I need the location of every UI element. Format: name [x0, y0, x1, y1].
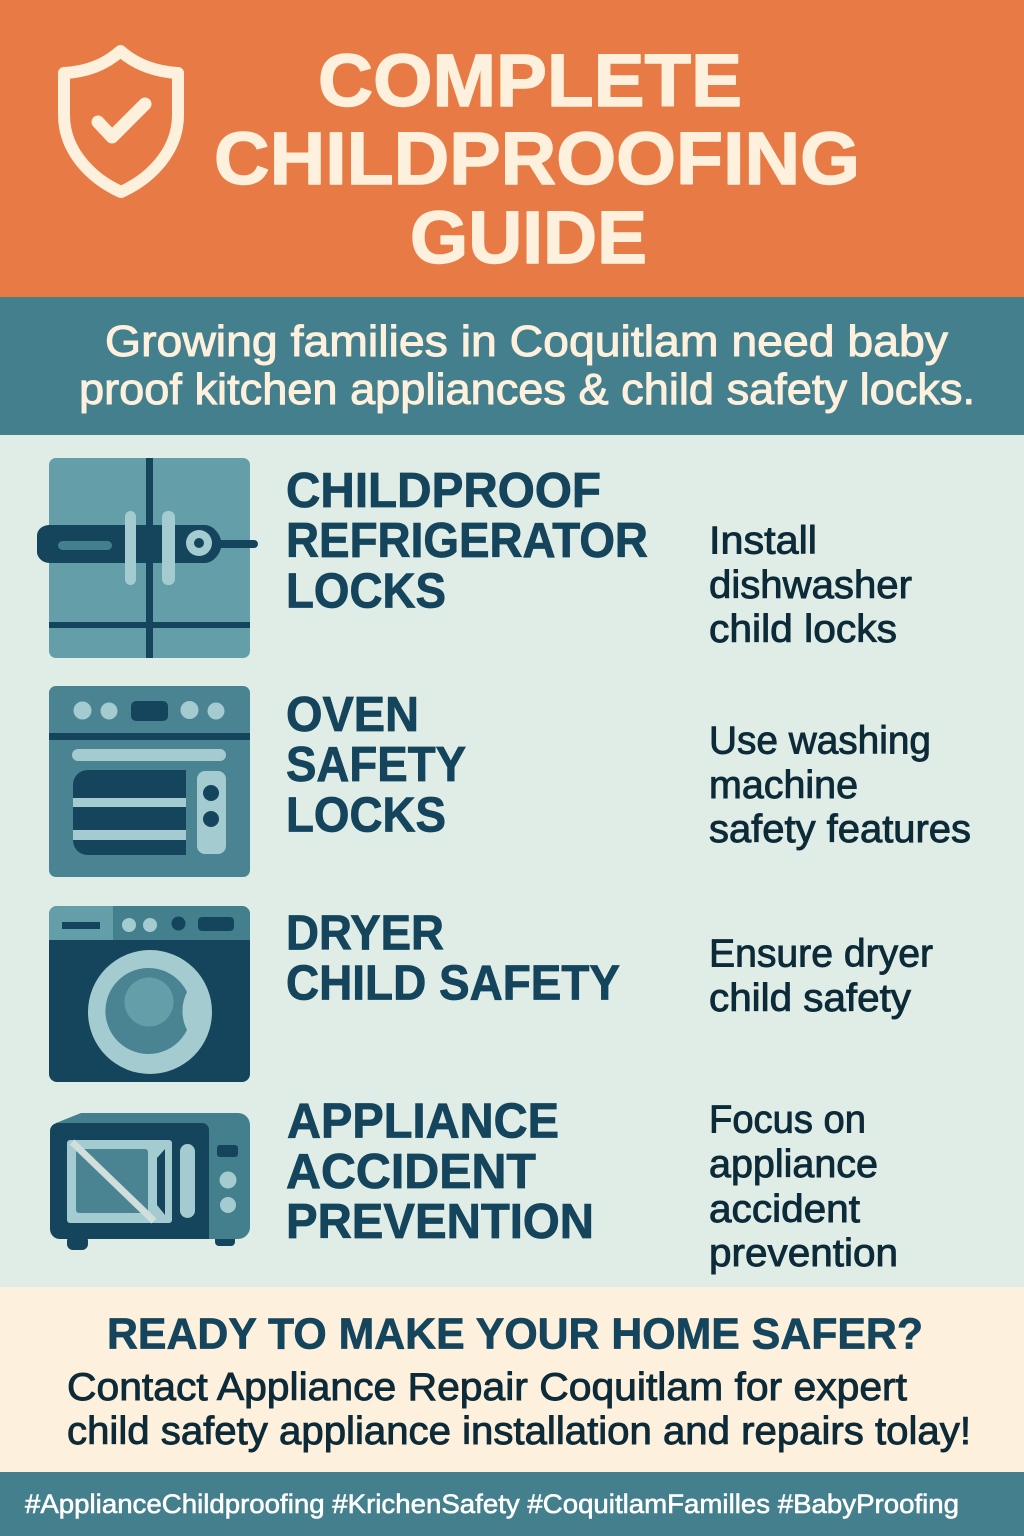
heading: REFRIGERATOR: [286, 514, 648, 568]
row: oven safety locks: [49, 686, 971, 877]
tip: child safety: [709, 977, 912, 1020]
tip: prevention: [709, 1232, 898, 1275]
header banner: [0, 0, 1024, 297]
heading: APPLIANCE: [287, 1094, 559, 1148]
icon: shield with check: [64, 51, 178, 192]
heading: ACCIDENT: [286, 1145, 536, 1199]
tip: Ensure dryer: [709, 932, 933, 976]
title: [214, 39, 860, 279]
tip: Install: [709, 520, 817, 562]
heading: PREVENTION: [286, 1195, 594, 1249]
tip: [709, 1098, 898, 1275]
tip: child locks: [709, 608, 897, 651]
call to action text: Contact Appliance Repair Coquitlam for expert: [67, 1366, 907, 1409]
row: refrigerator locks: [37, 458, 912, 658]
heading: [286, 464, 648, 618]
icon: dryer: [49, 906, 250, 1082]
heading: LOCKS: [286, 788, 446, 842]
icon: refrigerator with lock: [37, 458, 258, 658]
subtitle band: [0, 297, 1024, 435]
heading: [286, 906, 620, 1010]
row: dryer child safety: [49, 906, 933, 1082]
tip: appliance: [709, 1143, 878, 1186]
tip: [709, 720, 971, 851]
tip: dishwasher: [709, 564, 912, 607]
heading: LOCKS: [286, 564, 446, 618]
subtitle band: proof kitchen appliances & child safety locks.: [79, 365, 975, 414]
footer hashtags: #ApplianceChildproofing #KrichenSafety #CoquitlamFamilles #BabyProofing: [25, 1489, 959, 1519]
icon: oven: [49, 686, 250, 877]
heading: DRYER: [286, 906, 444, 960]
heading: SAFETY: [286, 738, 466, 792]
heading: CHILDPROOF: [286, 464, 601, 518]
subtitle band: Growing families in Coquitlam need baby: [105, 317, 948, 366]
call to action panel: [0, 1287, 1024, 1472]
call to action text: child safety appliance installation and repairs tolay!: [67, 1410, 971, 1453]
footer hashtags: [0, 1472, 1024, 1536]
icon: microwave: [50, 1113, 250, 1250]
heading: CHILD SAFETY: [286, 956, 620, 1010]
tip: machine: [709, 764, 858, 807]
tip: Use washing: [709, 720, 931, 762]
title: GUIDE: [410, 196, 647, 279]
tip: accident: [709, 1188, 860, 1231]
title: COMPLETE: [318, 39, 742, 122]
tip: safety features: [709, 808, 971, 851]
tip: Focus on: [709, 1098, 866, 1142]
heading: [286, 1094, 594, 1249]
tip: [709, 932, 933, 1020]
title: CHILDPROOFING: [214, 117, 860, 200]
call to action heading: READY TO MAKE YOUR HOME SAFER?: [107, 1310, 923, 1358]
heading: OVEN: [286, 688, 419, 742]
heading: [286, 688, 466, 842]
call to action text: [67, 1366, 971, 1453]
row: appliance accident prevention: [50, 1094, 898, 1275]
tip: [709, 520, 912, 651]
